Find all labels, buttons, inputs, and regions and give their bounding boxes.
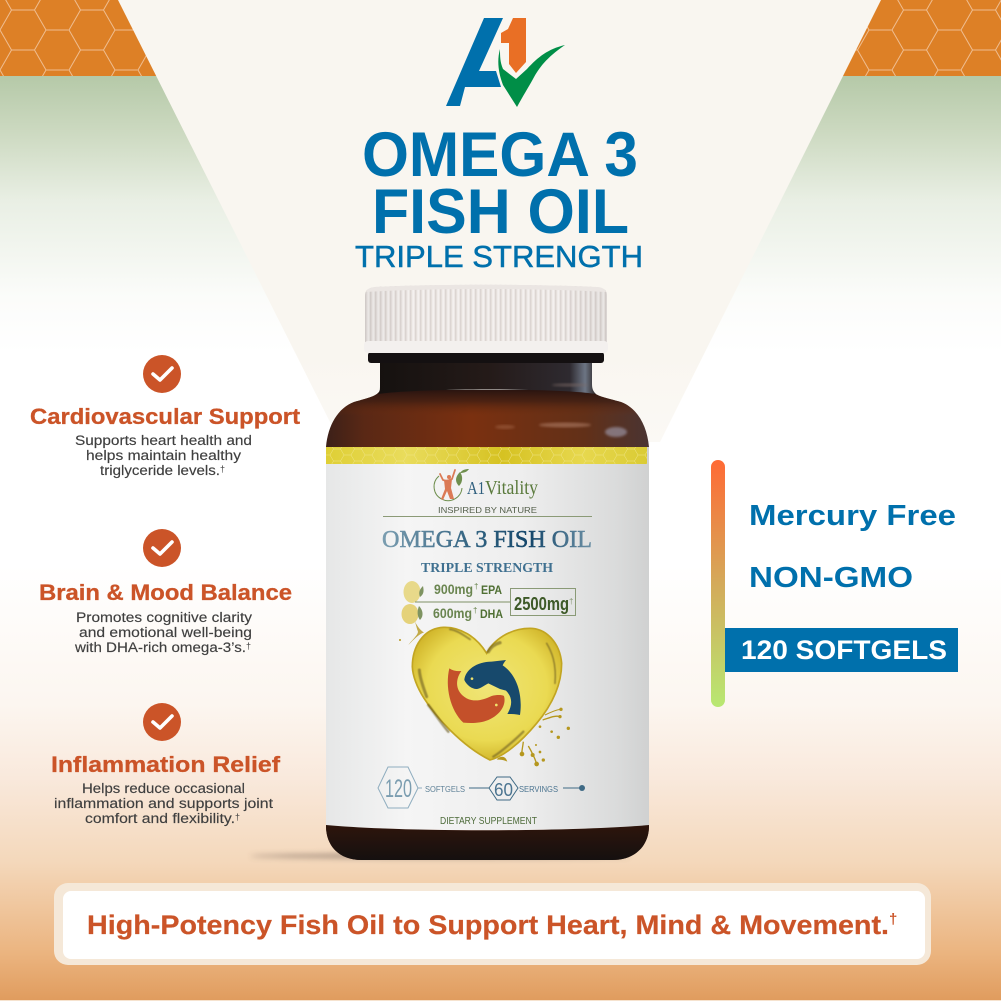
benefit: brain and mood balance: Promotes cognitive clarity	[76, 610, 252, 625]
bottom banner	[54, 883, 931, 965]
dosage: 2500mg	[514, 594, 569, 614]
benefit: cardiovascular support: triglyceride levels.	[100, 463, 220, 478]
dosage: 900mg	[434, 581, 473, 597]
neck	[378, 362, 596, 394]
benefit: inflammation relief: Inflammation Relief	[51, 752, 281, 777]
dosage: DHA	[480, 609, 503, 621]
lemons	[402, 581, 424, 624]
label count row: 60	[494, 780, 513, 800]
benefit: inflammation relief: †	[235, 812, 240, 822]
neck ring	[368, 352, 604, 363]
benefit: brain and mood balance	[39, 529, 292, 655]
title: FISH OIL	[372, 177, 629, 247]
benefit: cardiovascular support: helps maintain healthy	[86, 448, 241, 463]
cap	[364, 285, 608, 353]
dosage: †	[569, 597, 573, 606]
benefit: cardiovascular support: †	[220, 464, 225, 474]
bottle body	[326, 390, 649, 860]
honeycomb band right	[838, 0, 1001, 76]
label	[326, 447, 649, 830]
icon: check badge	[143, 529, 181, 567]
feature list: NON-GMO	[749, 562, 913, 594]
label yellow band	[326, 447, 647, 464]
softgels badge: 120 SOFTGELS	[741, 635, 947, 665]
bottle base	[326, 825, 649, 860]
icon: check badge	[143, 703, 181, 741]
feature list	[711, 460, 958, 707]
bottom banner: †	[889, 911, 897, 928]
heart dark oil streaks	[419, 629, 555, 757]
dosage	[415, 581, 576, 621]
benefit: brain and mood balance: with DHA-rich omega-3’s.	[74, 640, 246, 655]
feature list: Mercury Free	[749, 500, 956, 532]
gradient vertical bar	[711, 460, 725, 707]
benefit: inflammation relief: inflammation and supports joint	[54, 796, 273, 811]
benefit: inflammation relief: comfort and flexibility.	[85, 811, 235, 826]
dosage: †	[473, 606, 477, 615]
bottle shadow	[250, 854, 630, 858]
dosage: 600mg	[433, 605, 472, 621]
benefit: cardiovascular support: Supports heart health and	[75, 433, 252, 448]
shoulder highlights	[495, 422, 627, 437]
bottom banner: High-Potency Fish Oil to Support Heart, Mind & Movement.	[87, 910, 889, 940]
label subtitle: TRIPLE STRENGTH	[421, 561, 553, 576]
label logo: Vitality	[485, 477, 538, 499]
benefit: cardiovascular support	[30, 355, 301, 478]
title: OMEGA 3	[362, 120, 638, 190]
benefit: brain and mood balance: and emotional well-being	[79, 625, 252, 640]
fish symbol	[448, 660, 521, 723]
label footer: DIETARY SUPPLEMENT	[440, 815, 537, 827]
icon: check badge	[143, 355, 181, 393]
benefit: cardiovascular support: Cardiovascular Support	[30, 404, 301, 429]
label logo: A1	[467, 478, 485, 498]
benefit: inflammation relief: Helps reduce occasional	[82, 781, 245, 796]
benefit: brain and mood balance: †	[246, 641, 251, 651]
label count row: SERVINGS	[519, 784, 558, 794]
label count row: 120	[385, 775, 412, 803]
softgels badge	[725, 628, 958, 672]
title	[355, 120, 643, 274]
oil heart	[399, 622, 570, 766]
dosage: EPA	[481, 585, 502, 597]
label tagline: INSPIRED BY NATURE	[438, 505, 537, 515]
oil splash drops	[399, 622, 570, 766]
label count row: SOFTGELS	[425, 784, 465, 794]
label count row	[378, 767, 585, 808]
benefit: inflammation relief	[51, 703, 281, 826]
cream spotlight	[118, 0, 881, 442]
brand logo	[446, 18, 565, 107]
label product name: OMEGA 3 FISH OIL	[382, 527, 592, 553]
benefit: brain and mood balance: Brain & Mood Balance	[39, 580, 292, 605]
honeycomb band left	[0, 0, 160, 76]
label logo	[434, 469, 538, 501]
dosage: †	[474, 582, 478, 591]
title: TRIPLE STRENGTH	[355, 239, 643, 274]
supplement bottle	[326, 285, 649, 860]
